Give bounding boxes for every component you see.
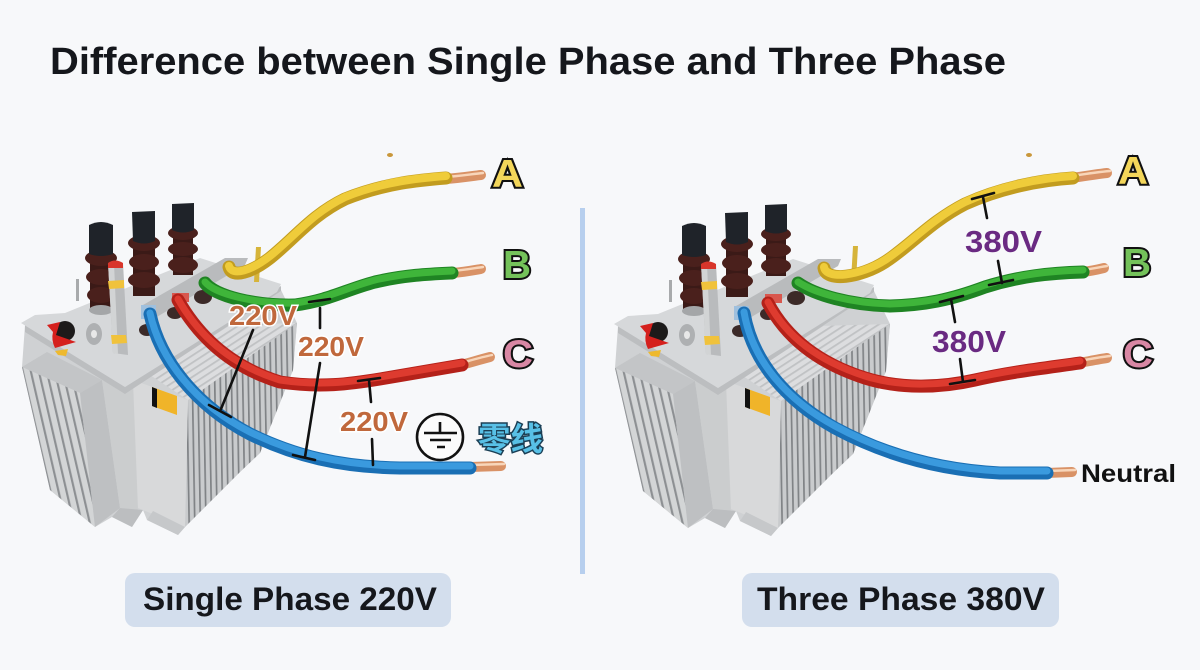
speck	[1026, 153, 1032, 157]
label C: C	[1123, 333, 1153, 376]
lightning arrester post	[701, 262, 721, 356]
left radiator	[22, 352, 120, 527]
panel: three phase	[614, 150, 1176, 627]
wire: A yellow	[824, 171, 1110, 277]
label C: C	[503, 333, 533, 376]
wire: B green	[798, 266, 1107, 306]
icon: ground symbol	[417, 414, 463, 460]
left radiator	[615, 353, 713, 528]
label 380V (B-C): 380V	[932, 324, 1006, 359]
red mascot sticker	[47, 321, 76, 356]
transformer: three phase	[614, 204, 890, 536]
bushing left	[85, 222, 117, 315]
bushing middle	[128, 211, 160, 296]
caption: three phase	[742, 573, 1059, 627]
terminal hardware	[732, 259, 841, 337]
terminal hardware	[139, 258, 248, 336]
front panels and feet	[695, 381, 781, 536]
bushing middle	[721, 212, 753, 297]
bushing right	[761, 204, 791, 276]
caption: single phase: Single Phase 220V	[143, 581, 438, 617]
warning label	[745, 388, 770, 416]
bushing right	[168, 203, 198, 275]
label: neutral wire chinese: 零线	[478, 421, 543, 457]
caption: single phase	[125, 573, 451, 627]
measure lines: 380V	[940, 193, 1013, 384]
wire: C red	[178, 299, 492, 385]
label A: A	[492, 153, 523, 196]
panel: single phase	[21, 153, 543, 627]
tank body	[22, 290, 297, 535]
front panels and feet	[102, 380, 188, 535]
transformer: single phase	[21, 203, 297, 535]
right radiator	[743, 324, 890, 528]
speck	[387, 153, 393, 157]
warning label	[152, 387, 177, 415]
label B: B	[503, 244, 531, 287]
measure lines: 220V	[209, 299, 380, 465]
wire: neutral blue	[150, 313, 504, 468]
right radiator	[150, 323, 297, 527]
label 220V (A-N): 220V	[229, 300, 297, 331]
red mascot sticker	[640, 322, 669, 357]
wire: neutral blue	[744, 312, 1075, 473]
label 220V (B-N): 220V	[298, 331, 364, 362]
bushing left	[678, 223, 710, 316]
wire: A yellow	[229, 173, 483, 273]
label 380V (A-B): 380V	[965, 224, 1042, 259]
washer and small rod	[669, 246, 858, 346]
caption: three phase: Three Phase 380V	[757, 581, 1046, 617]
label A: A	[1118, 150, 1148, 193]
panel divider	[580, 208, 585, 574]
title: Difference between Single Phase and Three Phase	[50, 41, 1006, 83]
lightning arrester post	[108, 260, 128, 355]
top plate	[21, 258, 281, 394]
tank body	[615, 291, 890, 536]
label 220V (C-N): 220V	[340, 406, 408, 437]
wire: B green	[205, 267, 483, 305]
washer and small rod	[76, 247, 261, 345]
wire: C red	[768, 302, 1110, 386]
top plate	[614, 259, 874, 395]
label: neutral: Neutral	[1081, 460, 1176, 488]
label B: B	[1123, 242, 1151, 285]
